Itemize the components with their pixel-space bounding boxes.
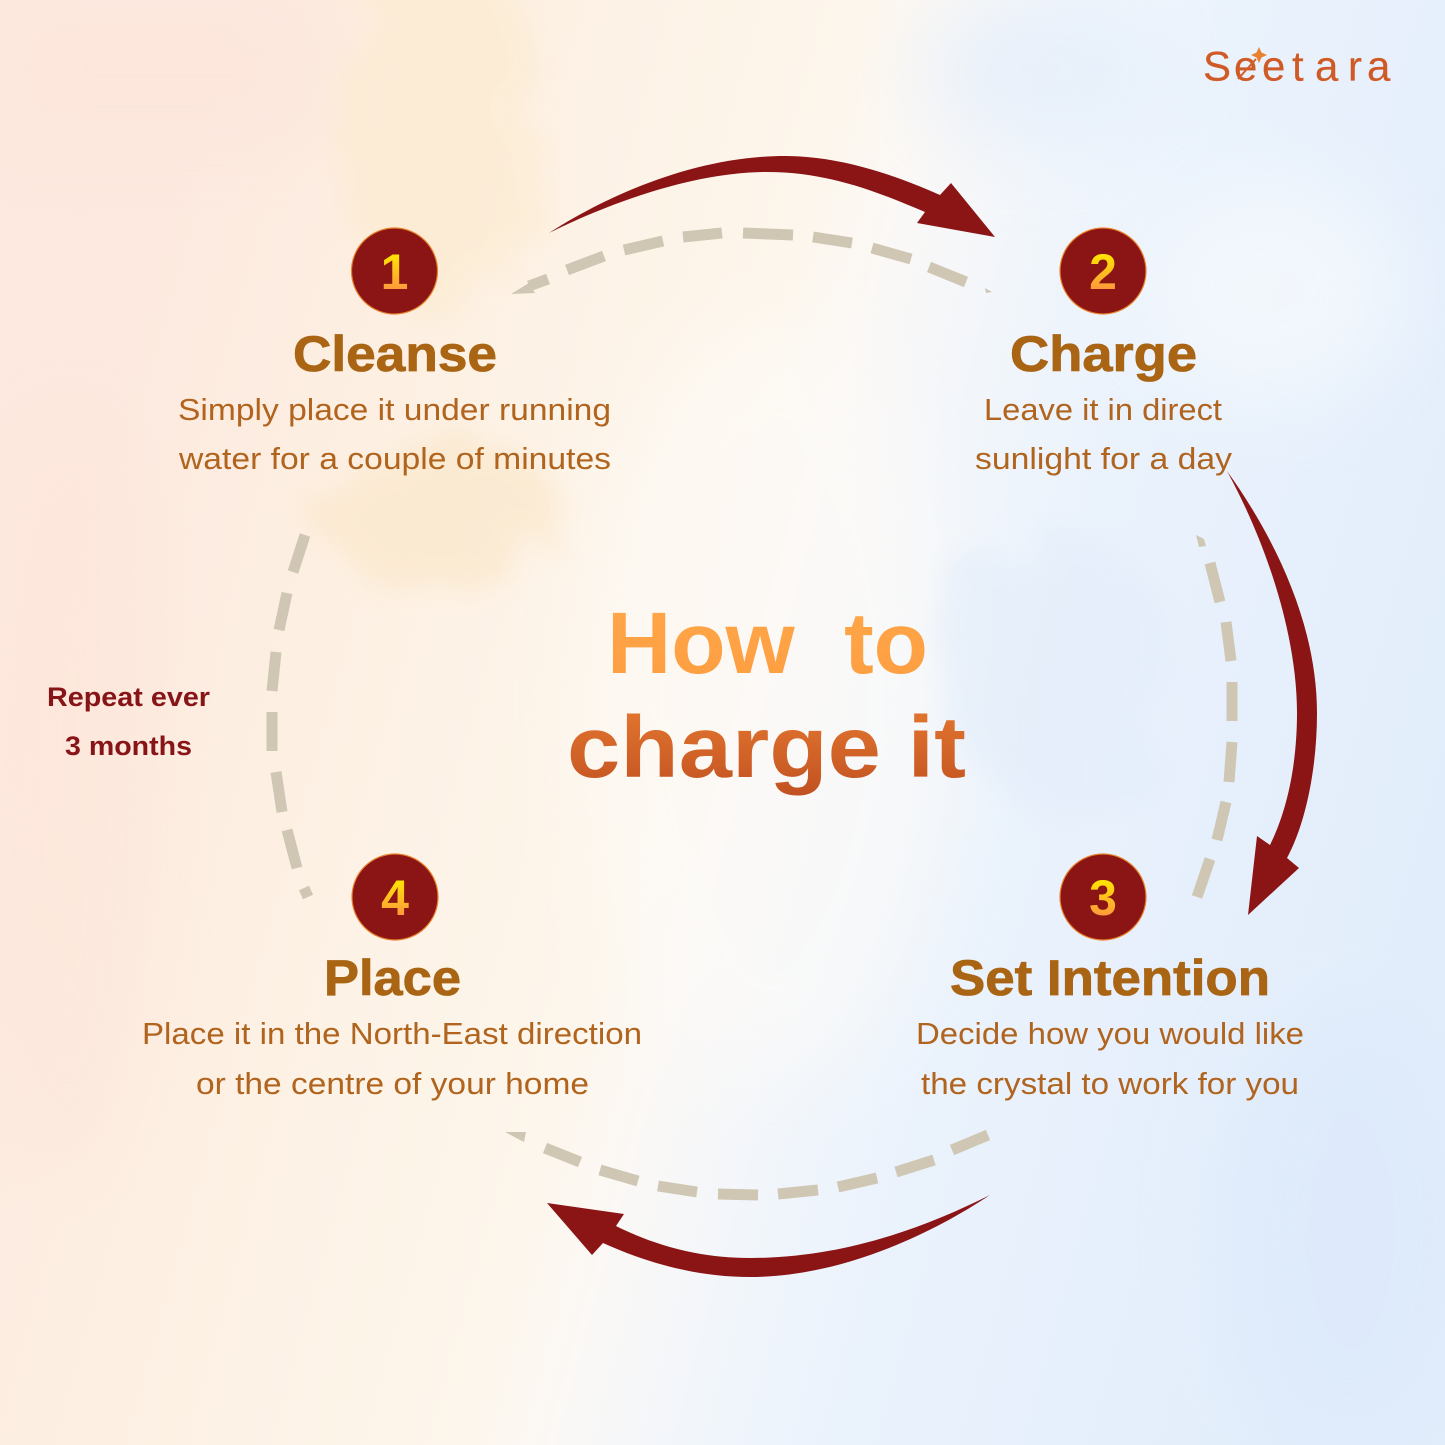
text: Place description: Place it in the North-East direction	[142, 1016, 642, 1051]
badge 4: 4	[381, 870, 409, 926]
arrow: step 3 to step 4	[547, 1195, 990, 1277]
badge 3	[1060, 854, 1146, 940]
step 1: Cleanse	[178, 228, 611, 476]
badge 3: 3	[1089, 870, 1117, 926]
note: repeat every 3 months: Repeat ever	[47, 682, 211, 712]
badge 2	[1060, 228, 1146, 314]
heading: Cleanse: Cleanse	[293, 326, 497, 382]
step 3: Set Intention	[916, 854, 1304, 1101]
badge 2: 2	[1089, 244, 1117, 300]
icon: logo wand	[1238, 59, 1256, 79]
text: Set Intention description: the crystal to work for you	[921, 1066, 1299, 1101]
title: How to charge it: charge it	[567, 699, 966, 796]
text: Charge description: sunlight for a day	[975, 441, 1233, 476]
text: Cleanse description	[178, 392, 611, 476]
text: Set Intention description: Decide how you would like	[916, 1016, 1304, 1051]
badge 1: 1	[381, 244, 408, 300]
heading: Place: Place	[324, 950, 461, 1006]
step 2: Charge	[975, 228, 1233, 476]
text: Charge description: Leave it in direct	[984, 392, 1222, 427]
icon: logo star	[1251, 47, 1267, 63]
text: Charge description	[975, 392, 1233, 476]
arrow: step 1 to step 2	[549, 156, 995, 237]
logo: Seetara: Seetara	[1203, 42, 1391, 90]
text: Place description: or the centre of your home	[196, 1066, 589, 1101]
heading: Set Intention: Set Intention	[950, 950, 1270, 1006]
badge 4	[352, 854, 438, 940]
badge 1	[352, 228, 438, 314]
text: Place description	[142, 1016, 642, 1101]
text: Set Intention description	[916, 1016, 1304, 1101]
text: Cleanse description: Simply place it under running	[178, 392, 611, 427]
step 4: Place	[142, 854, 642, 1101]
heading: Charge: Charge	[1010, 326, 1197, 382]
note: repeat every 3 months: 3 months	[65, 731, 192, 761]
note: repeat every 3 months	[47, 682, 211, 761]
title: How to charge it	[567, 595, 966, 796]
title: How to charge it: How to	[607, 595, 928, 692]
arrow: step 2 to step 3	[1227, 471, 1317, 915]
text: Cleanse description: water for a couple of minutes	[178, 441, 611, 476]
dashed cycle ring	[272, 233, 1232, 1195]
